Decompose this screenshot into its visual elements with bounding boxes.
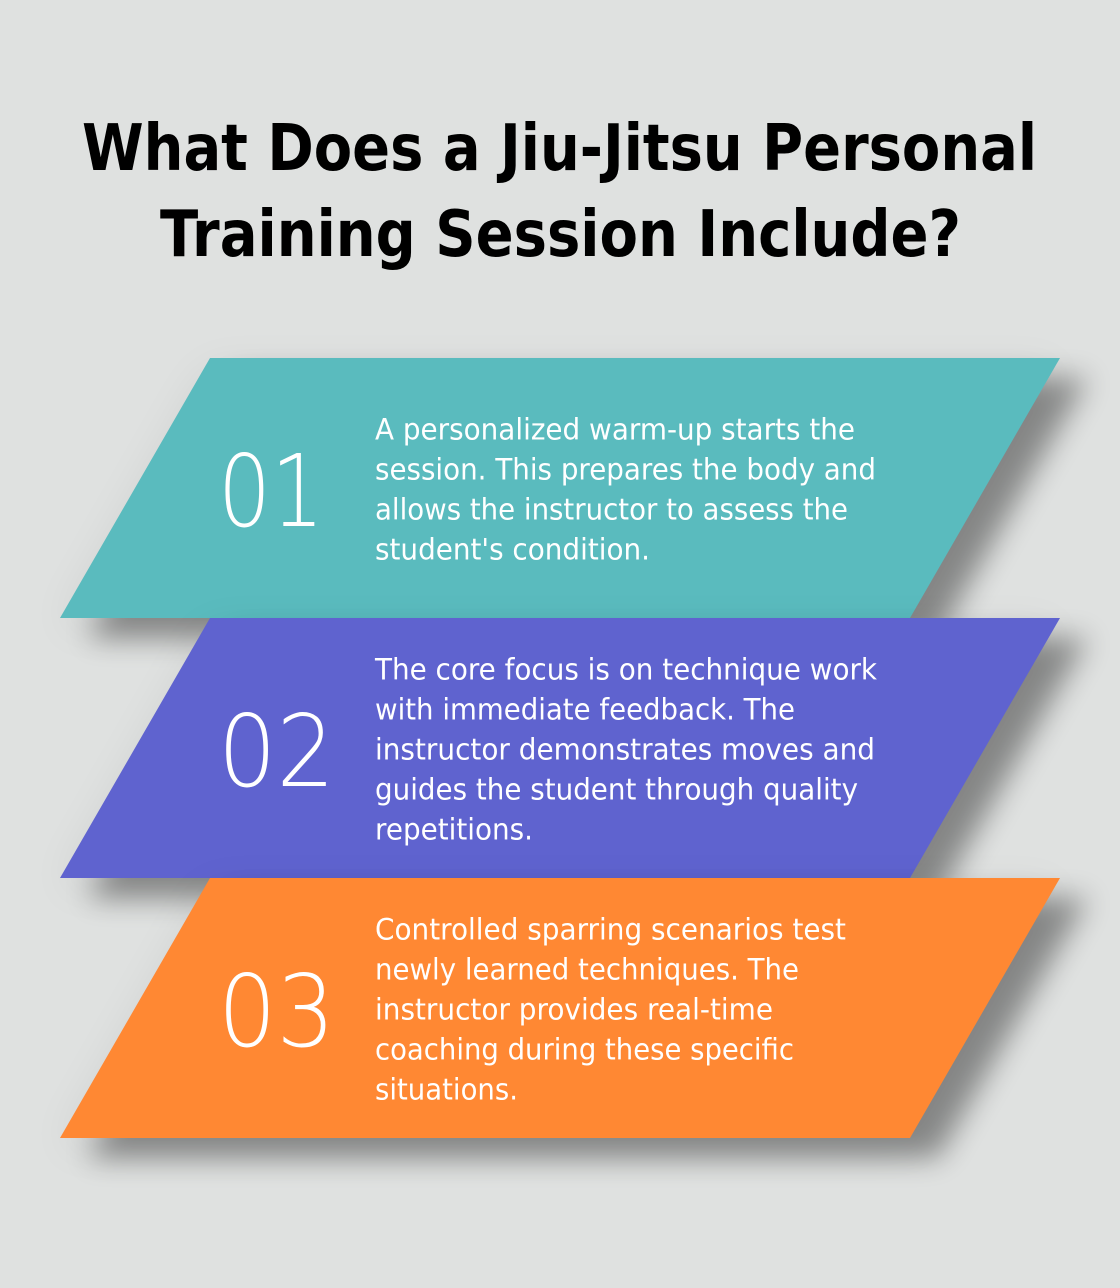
step 02 description: instructor demonstrates moves and (375, 732, 875, 766)
step 01 description: allows the instructor to assess the (375, 492, 848, 526)
step 02 description: with immediate feedback. The (375, 692, 795, 726)
step 02 description: The core focus is on technique work (374, 652, 877, 686)
title (82, 112, 1037, 272)
step 03 description (375, 912, 846, 1106)
panel: step 01 (60, 358, 1088, 638)
step 01 description: student's condition. (375, 532, 650, 566)
step 03 description: instructor provides real-time (375, 992, 773, 1026)
step 02 description: repetitions. (375, 812, 533, 846)
number 02: 02 (218, 693, 335, 810)
step 01 description: session. This prepares the body and (375, 452, 876, 486)
panel: step 02 (60, 618, 1088, 898)
step 03 description: Controlled sparring scenarios test (375, 912, 846, 946)
step 01 description: A personalized warm-up starts the (375, 412, 855, 446)
number 03: 03 (218, 953, 335, 1070)
step 03 description: coaching during these specific (375, 1032, 794, 1066)
step 02 description: guides the student through quality (375, 772, 858, 806)
step 02 description (374, 652, 877, 846)
title: Training Session Include? (160, 198, 961, 272)
number 01: 01 (218, 433, 324, 550)
step 03 description: situations. (375, 1072, 518, 1106)
panel: step 03 (60, 878, 1088, 1158)
step 01 description (375, 412, 876, 566)
step 03 description: newly learned techniques. The (375, 952, 799, 986)
